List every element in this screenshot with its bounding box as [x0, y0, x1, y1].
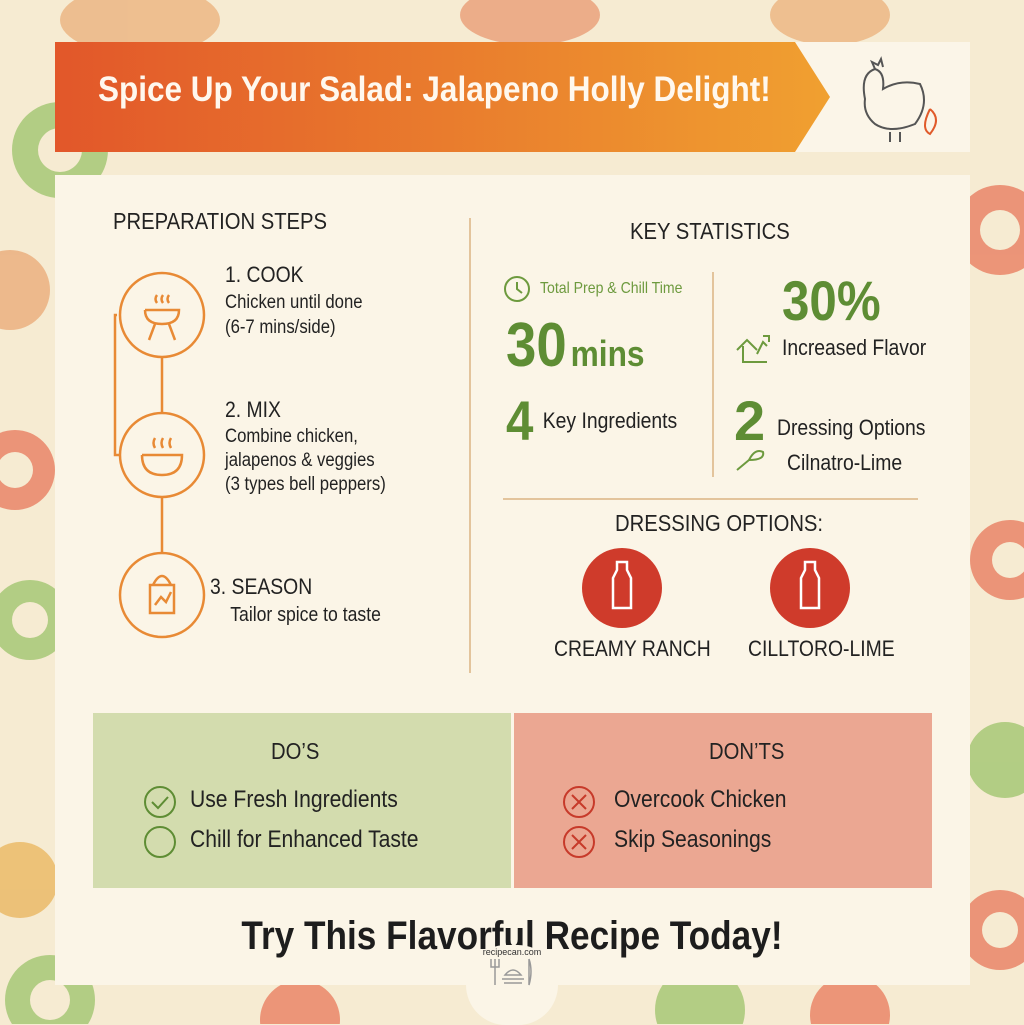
step 2: (3 types bell peppers): [225, 474, 386, 495]
panel: do's: [93, 713, 511, 888]
footer logo: recipecan.com: [483, 947, 541, 957]
panel: key statistics: Dressing Options: [777, 415, 926, 440]
panel: preparation steps: [113, 208, 386, 638]
panel: don'ts: Skip Seasonings: [614, 826, 771, 853]
heading: KEY STATISTICS: [630, 218, 790, 244]
panel: do's: Chill for Enhanced Taste: [190, 826, 419, 853]
step 1: (6-7 mins/side): [225, 317, 336, 338]
panel: do's: DO’S: [271, 738, 319, 764]
heading: PREPARATION STEPS: [113, 208, 327, 234]
panel: do's: Use Fresh Ingredients: [190, 786, 398, 813]
step 2: jalapenos & veggies: [225, 450, 375, 471]
panel: key statistics: [504, 218, 926, 477]
icon: clock: [504, 276, 530, 302]
panel: key statistics: Increased Flavor: [782, 335, 926, 360]
stat: 30 mins: 30 mins: [506, 311, 645, 380]
step 3: [210, 574, 381, 626]
stat: 30%: 30%: [782, 269, 881, 332]
panel: dressing options: CILLTORO-LIME: [748, 636, 895, 661]
panel: key statistics: Cilnatro-Lime: [787, 450, 902, 475]
panel: key statistics: Total Prep & Chill Time: [540, 280, 682, 297]
panel: don'ts: Overcook Chicken: [614, 786, 787, 813]
icon: chicken: [862, 56, 938, 142]
header banner: [55, 42, 970, 152]
stat: 2 dressings: 2: [734, 389, 765, 452]
step 1: Chicken until done: [225, 292, 363, 313]
stat: 4 ingredients: 4 Key Ingredients: [506, 389, 677, 452]
step 1: [225, 262, 363, 338]
footer call to action: Try This Flavorful Recipe Today!: [241, 914, 783, 958]
icon: lime bottle: [770, 548, 850, 628]
panel: don'ts: DON’TS: [709, 738, 784, 764]
footer logo: [466, 945, 558, 1025]
step 1: 1. COOK: [225, 262, 304, 287]
step 3: Tailor spice to taste: [230, 604, 381, 626]
step 2: 2. MIX: [225, 397, 281, 422]
panel: dressing options: CREAMY RANCH: [554, 636, 711, 661]
title: Spice Up Your Salad: Jalapeno Holly Delight!: [98, 70, 771, 109]
panel: dressing options: [554, 510, 895, 661]
step 2: Combine chicken,: [225, 426, 358, 447]
icon: ranch bottle: [582, 548, 662, 628]
step 2: [224, 397, 386, 495]
main card: [55, 175, 970, 985]
panel: don'ts: [514, 713, 932, 888]
step 3: 3. SEASON: [210, 574, 312, 599]
heading: DRESSING OPTIONS:: [615, 510, 823, 536]
